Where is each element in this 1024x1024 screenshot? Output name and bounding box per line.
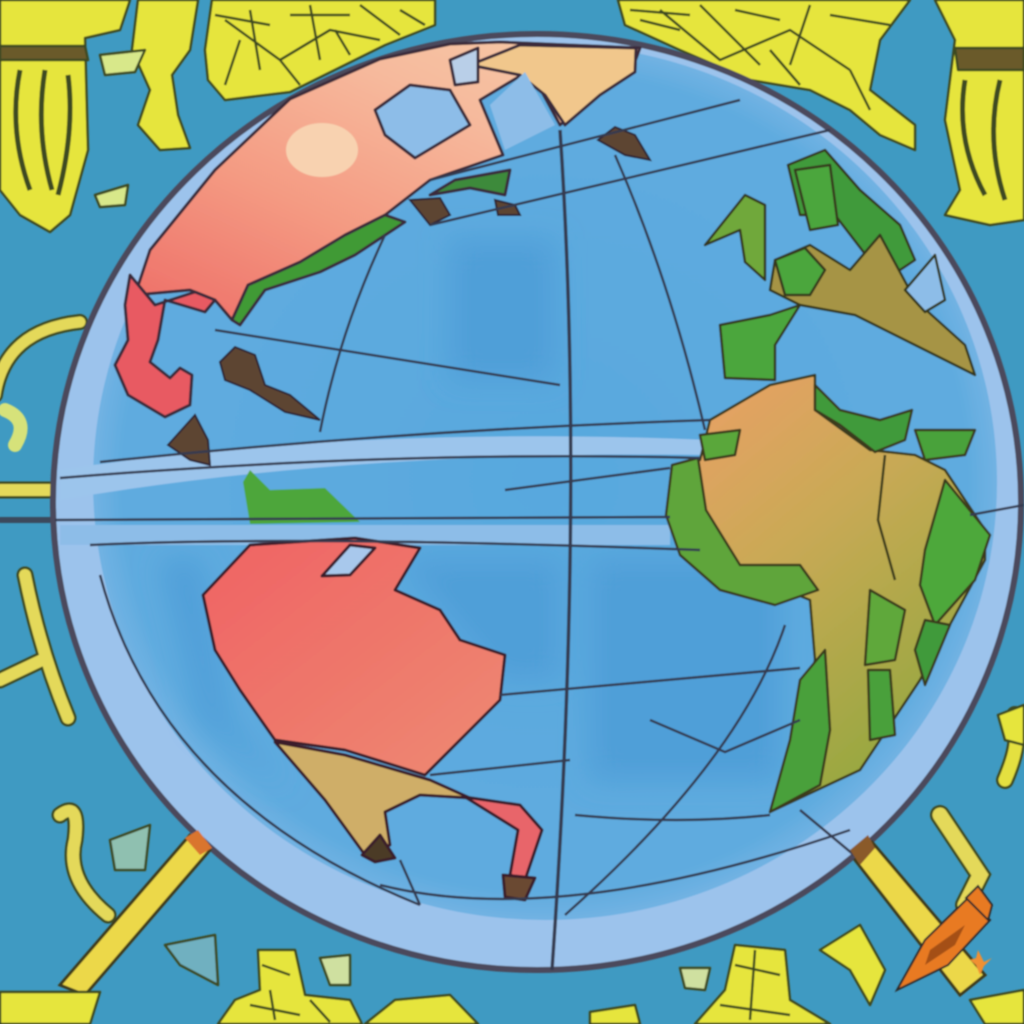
decorative yellow doodles: top xyxy=(0,0,1024,232)
left bar xyxy=(0,482,50,498)
green top xyxy=(243,470,360,524)
right squiggle xyxy=(1005,715,1016,780)
left bone xyxy=(0,575,68,718)
africa xyxy=(666,375,990,812)
mexico xyxy=(115,275,215,417)
hudson bay xyxy=(375,85,470,158)
ocean light band xyxy=(60,436,710,500)
lower ocean band xyxy=(60,525,670,545)
florida green xyxy=(430,170,510,195)
bottom centre doodles xyxy=(218,950,362,1024)
arabian green xyxy=(815,385,912,452)
icon: lower right crayon xyxy=(850,835,985,995)
decorative yellow doodles: bottom xyxy=(0,705,1024,1024)
icon: lower left crayon xyxy=(60,830,212,995)
north america xyxy=(115,42,640,417)
south red tip xyxy=(465,797,542,880)
south america xyxy=(203,470,542,900)
left hook xyxy=(0,322,80,395)
west africa green xyxy=(666,458,818,605)
east africa green xyxy=(920,480,990,625)
small scribbles xyxy=(320,955,350,985)
icon: crayon watermark xyxy=(897,886,992,990)
north east sea xyxy=(490,72,555,150)
meridians xyxy=(552,130,571,970)
top left doodle cluster xyxy=(0,0,435,232)
bottom left bowl xyxy=(0,992,100,1024)
lower right squiggle xyxy=(940,815,980,905)
equator and parallels xyxy=(55,517,670,520)
europe xyxy=(705,150,975,380)
left scribble xyxy=(5,410,21,445)
decorative yellow doodles: left side xyxy=(0,322,1016,915)
island xyxy=(598,127,650,160)
caribbean islands xyxy=(168,127,650,465)
top right doodle cluster xyxy=(618,0,1024,225)
dark equator stub xyxy=(0,517,55,523)
ocean darker patches xyxy=(160,240,780,790)
cape xyxy=(503,875,535,900)
greenland top xyxy=(470,45,636,125)
ocean xyxy=(93,44,997,920)
bottom right doodles xyxy=(695,945,830,1024)
lake xyxy=(322,545,375,576)
lower left squiggle xyxy=(60,811,108,915)
ice inlet xyxy=(450,48,478,85)
east coast green xyxy=(232,215,405,325)
sun spot xyxy=(286,123,358,177)
south tan xyxy=(275,742,470,855)
